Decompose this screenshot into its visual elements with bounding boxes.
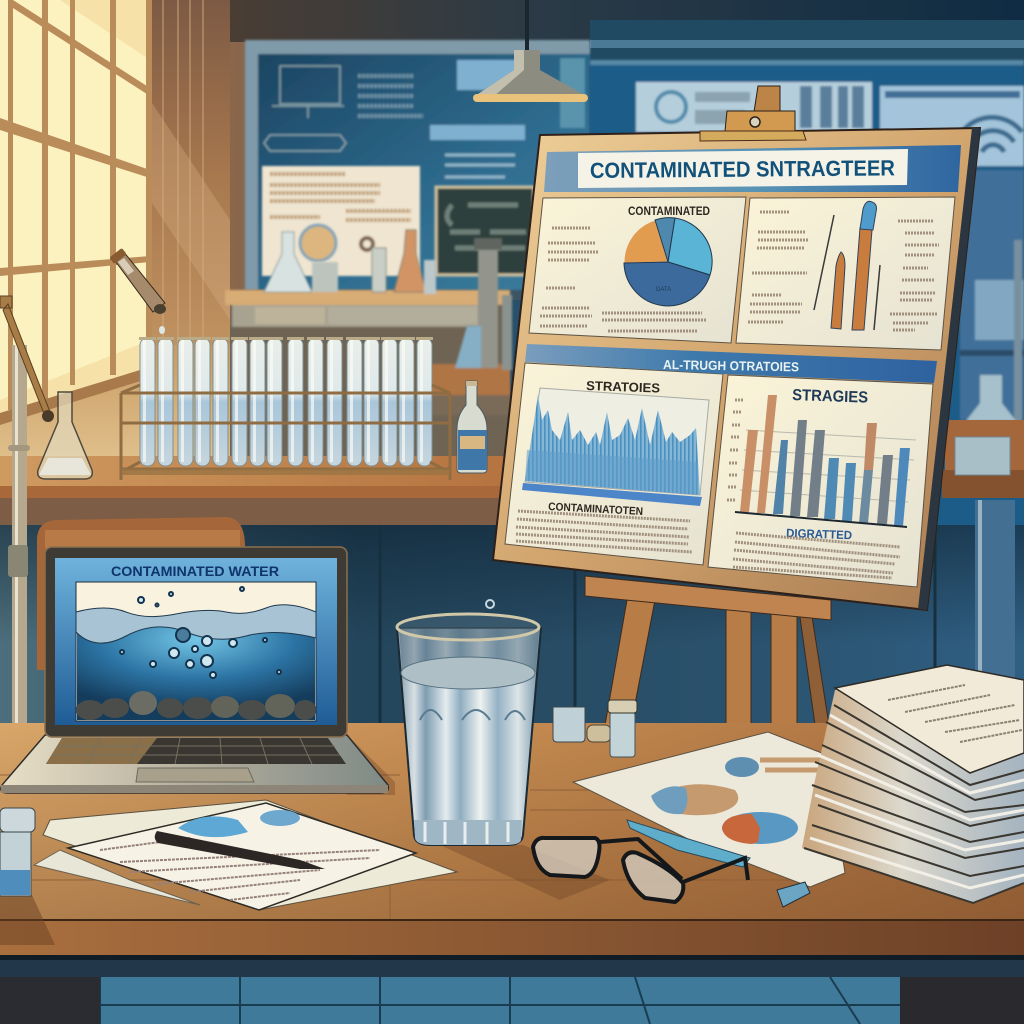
- window: [0, 0, 152, 425]
- laptop screen: CONTAMINATED WATER: [111, 563, 279, 579]
- laptop: [1, 547, 388, 793]
- panel: thermometer columns: [736, 197, 955, 350]
- right background posters: [560, 58, 1024, 532]
- panel: line chart: [505, 363, 723, 565]
- pie: [624, 218, 712, 306]
- panel: bar chart: [708, 375, 933, 587]
- laptop base: [1, 735, 388, 793]
- header band: [544, 145, 961, 192]
- paper stack: [802, 665, 1024, 903]
- header band: CONTAMINATED SNTRAGTEER: [590, 155, 895, 183]
- test tube rack: [121, 337, 450, 480]
- panel: pie chart: CONTAMINATED: [628, 204, 710, 218]
- floor and desk legs: [0, 977, 1024, 1024]
- desk: [0, 723, 1024, 977]
- retort stand: [0, 296, 54, 725]
- left jar: [0, 808, 55, 945]
- small vials: [553, 700, 637, 757]
- eyeglasses: [533, 838, 748, 902]
- icon: dropper: [109, 248, 166, 334]
- wall poster: [262, 166, 420, 276]
- bars: [740, 395, 910, 526]
- map documents: [573, 732, 845, 887]
- water picture: [76, 582, 316, 721]
- lab bench: [0, 420, 1024, 525]
- small blue pen clip: [777, 882, 810, 907]
- bottle: [457, 381, 487, 473]
- wall blue board: [245, 40, 590, 290]
- background wall: [0, 0, 1024, 530]
- area spikes: [525, 395, 700, 495]
- panel: bar chart: DIGRATTED: [786, 526, 853, 542]
- pebbles: [76, 691, 316, 720]
- easel legs: [585, 576, 831, 725]
- small chalkboard: [436, 187, 534, 275]
- chair: [37, 517, 245, 670]
- document with pen: [34, 800, 457, 910]
- strategies band: AL-TRUGH OTRATOIES: [663, 357, 799, 374]
- panel: line chart: STRATOIES: [586, 378, 661, 396]
- panel: line chart: CONTAMINATOTEN: [548, 501, 643, 518]
- water glass: [397, 600, 541, 845]
- faucet stand: [430, 238, 512, 415]
- laptop screen: [45, 547, 347, 737]
- lamp: [473, 0, 588, 102]
- back counter with flasks: [225, 230, 510, 327]
- panel: bar chart: STRAGIES: [792, 387, 869, 407]
- panel: pie chart: [529, 197, 746, 343]
- strategies band: [525, 344, 937, 383]
- board clip: [700, 86, 806, 141]
- pie: DATA: [656, 287, 671, 293]
- panel: strategy board: [493, 86, 980, 610]
- lower wall panels: [0, 500, 1024, 730]
- conical flask: [38, 392, 92, 479]
